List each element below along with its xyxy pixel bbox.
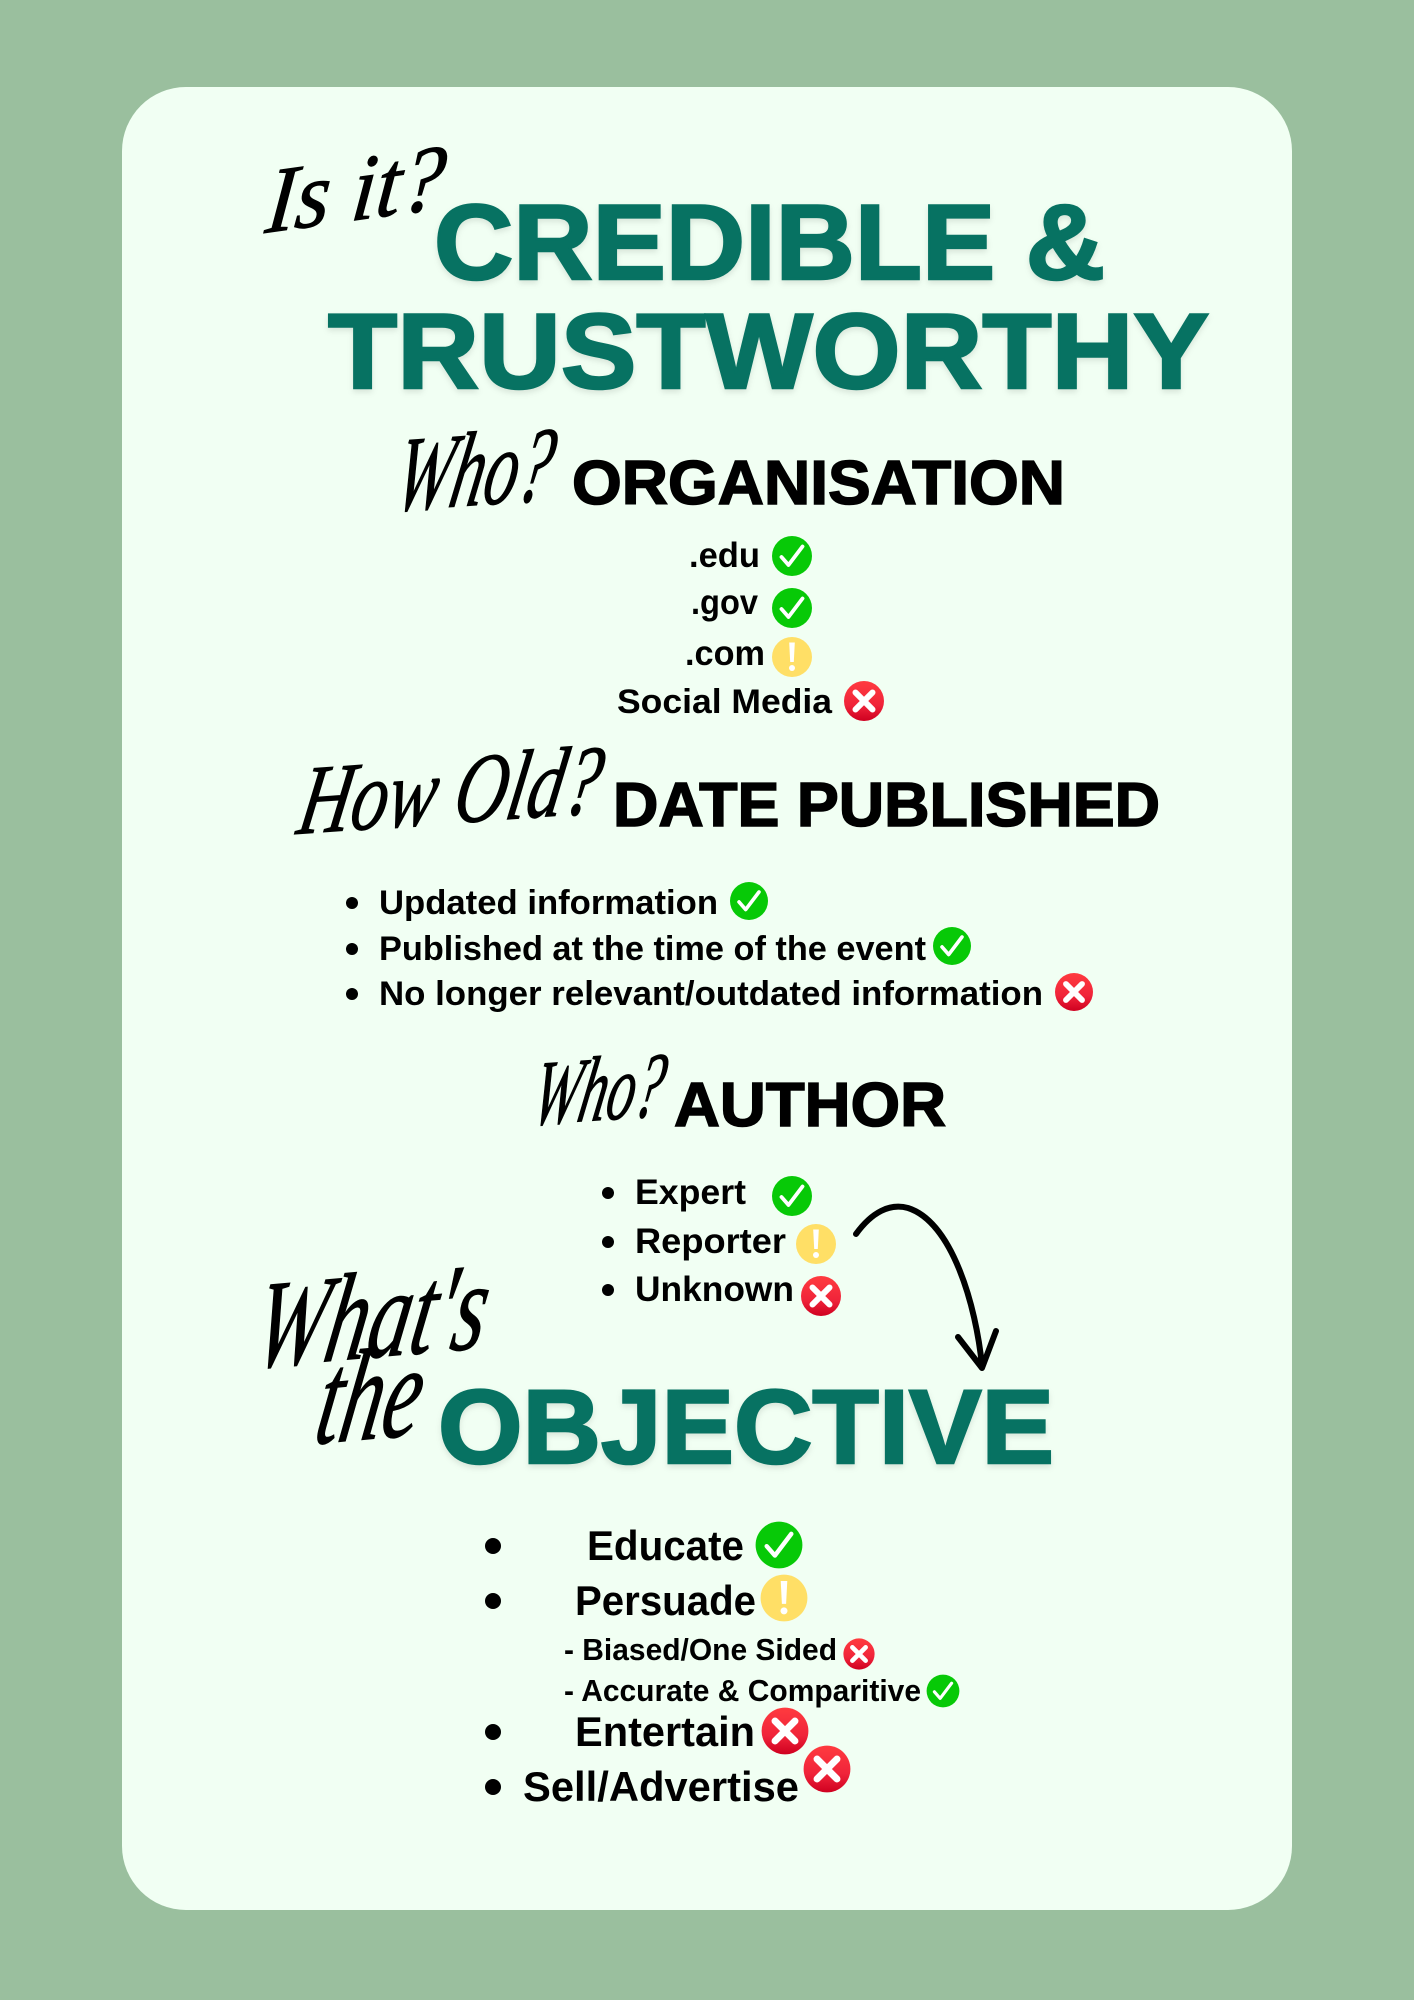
item: .com: .com — [685, 634, 765, 673]
heading: Who? organisation: Who? — [386, 405, 565, 535]
item: outdated information: No longer relevant/outdated information — [379, 975, 1043, 1013]
heading: Who? organisation: ORGANISATION — [572, 449, 1065, 518]
list: author — [602, 1173, 841, 1316]
item: updated information: Updated information — [379, 884, 718, 922]
item: reporter: Reporter — [635, 1222, 786, 1261]
title: credible and trustworthy: CREDIBLE & — [434, 182, 1105, 302]
heading: What's the script — [245, 1237, 501, 1473]
heading: Who? author: Who? — [525, 1034, 675, 1146]
panel: card — [122, 87, 1292, 1910]
item: persuade — [485, 1575, 807, 1624]
title: objective: OBJECTIVE — [438, 1369, 1054, 1486]
item: accurate: - Accurate & Comparitive — [564, 1673, 921, 1708]
item: entertain — [485, 1708, 808, 1755]
title: credible and trustworthy — [328, 182, 1209, 411]
item: unknown — [602, 1270, 841, 1316]
list: date published — [346, 882, 1093, 1013]
heading: How old? date published — [290, 724, 1160, 856]
item: .com — [685, 634, 812, 677]
item: educate — [485, 1522, 802, 1569]
item: unknown: Unknown — [635, 1270, 794, 1309]
heading: What's the script: What's — [245, 1237, 501, 1396]
list: organisation domains — [617, 536, 884, 721]
item: sell/advertise — [485, 1746, 850, 1810]
item: expert — [602, 1173, 812, 1216]
item: published at the time: Published at the time of the event — [379, 930, 926, 968]
arrow: author to objective — [856, 1207, 996, 1368]
item: .edu — [689, 536, 812, 576]
item: educate: Educate — [587, 1522, 744, 1569]
heading: Who? author — [525, 1034, 946, 1146]
item: .edu: .edu — [689, 536, 760, 575]
heading: How old? date published: DATE PUBLISHED — [613, 771, 1160, 840]
item: sell/advertise: Sell/Advertise — [523, 1763, 799, 1810]
item: persuade: Persuade — [575, 1577, 756, 1624]
item: .gov: .gov — [691, 583, 758, 622]
list: objectives — [485, 1522, 959, 1810]
heading: What's the script: the — [307, 1317, 436, 1473]
heading: How old? date published: How Old? — [290, 724, 612, 856]
item: expert: Expert — [635, 1173, 746, 1212]
heading: Who? organisation — [386, 405, 1065, 535]
item: biased: - Biased/One Sided — [564, 1632, 837, 1667]
item: .gov — [691, 583, 812, 628]
item: social media: Social Media — [617, 683, 833, 721]
title: credible and trustworthy: TRUSTWORTHY — [328, 291, 1209, 411]
item: reporter — [602, 1222, 836, 1264]
item: entertain: Entertain — [575, 1708, 755, 1755]
heading: Is it? script: Is it? — [261, 125, 451, 254]
heading: Who? author: AUTHOR — [674, 1071, 946, 1140]
